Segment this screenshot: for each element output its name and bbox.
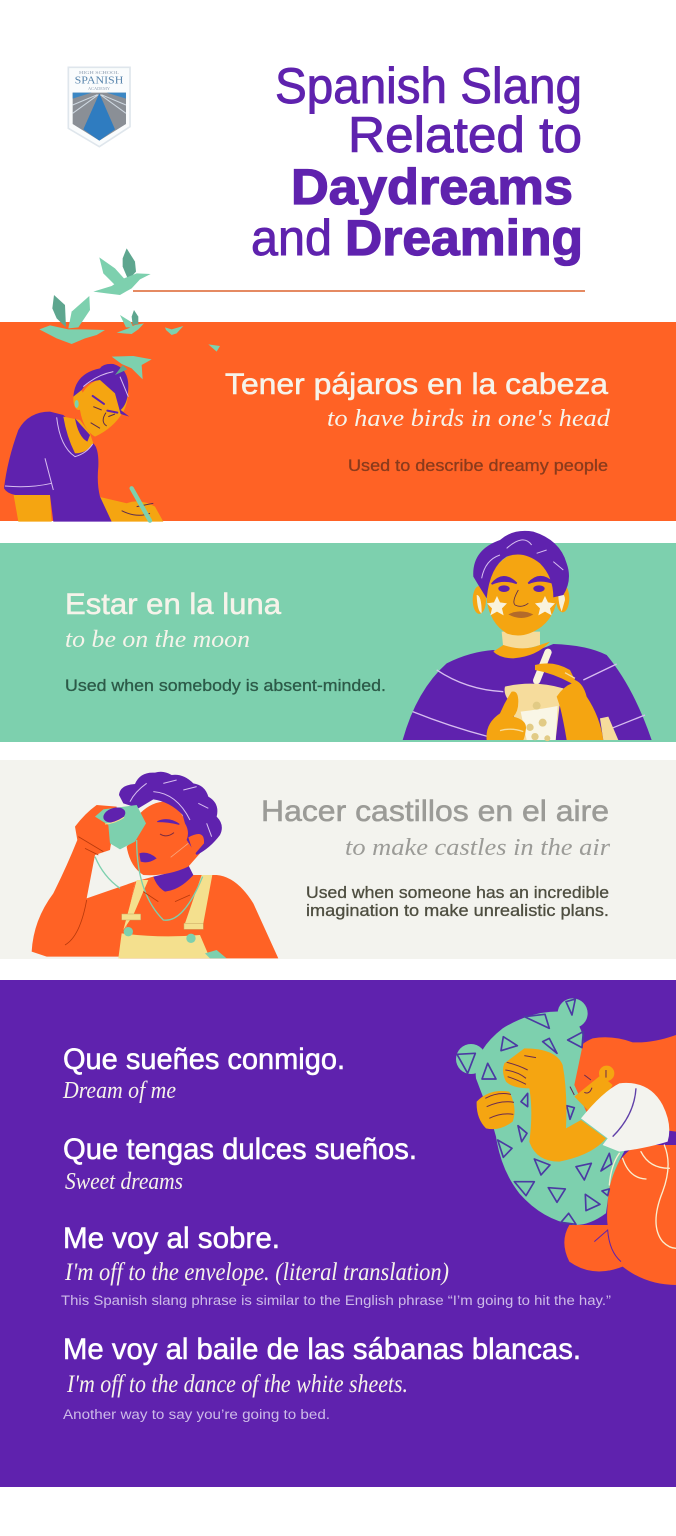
- phrase: Me voy al baile de las sábanas blancas: I'm off to the dance of the white sheets.: [66, 1371, 408, 1398]
- illustration: person with bubble tea: [403, 531, 652, 741]
- title: Daydreams: [291, 159, 573, 215]
- pattern: triangles on bear: [457, 999, 612, 1224]
- phrase: Me voy al sobre: [61, 1222, 611, 1308]
- phrase: Que sueñes conmigo: Que sueñes conmigo.: [63, 1043, 345, 1076]
- translation: to be on the moon: [65, 627, 250, 653]
- description: Used when someone has an incredible: [306, 884, 609, 902]
- description: Used when somebody is absent-minded.: [65, 677, 386, 695]
- heading: Tener pájaros en la cabeza: Tener pájaros en la cabeza: [225, 368, 608, 401]
- title: Dreaming: [345, 210, 583, 266]
- heading: Estar en la luna: Estar en la luna: [65, 588, 281, 621]
- phrase: Que sueñes conmigo: Dream of me: [62, 1078, 176, 1104]
- logo: Spanish academy shield: HIGH SCHOOL: [79, 70, 119, 75]
- logo: Spanish academy shield: [68, 67, 130, 147]
- panel: hacer castillos en el aire: [0, 760, 676, 959]
- translation: to have birds in one's head: [327, 406, 611, 432]
- title: and: [251, 210, 332, 266]
- logo: Spanish academy shield: SPANISH: [75, 75, 123, 86]
- description: imagination to make unrealistic plans.: [306, 902, 609, 920]
- phrase: Me voy al baile de las sábanas blancas: [63, 1333, 581, 1422]
- phrase: Me voy al sobre: This Spanish slang phrase is similar to the English phrase “I’m going to hit the hay.”: [61, 1293, 611, 1308]
- illustration: person with camera: [32, 772, 278, 958]
- phrase: Me voy al baile de las sábanas blancas: Another way to say you’re going to bed.: [63, 1407, 330, 1422]
- phrase: Me voy al sobre: Me voy al sobre.: [63, 1222, 280, 1255]
- icon: flock of birds: [39, 248, 220, 352]
- heading: Hacer castillos en el aire: Hacer castillos en el aire: [261, 795, 609, 828]
- panel: sleep phrases: [0, 980, 676, 1487]
- title: Spanish Slang: [275, 58, 582, 114]
- description: Used to describe dreamy people: [348, 457, 608, 475]
- description: [306, 884, 609, 920]
- phrase: Que tengas dulces sueños: Que tengas dulces sueños.: [63, 1133, 417, 1166]
- illustration: person with birds flying from head: [4, 248, 220, 522]
- panel: tener pájaros en la cabeza: [0, 248, 676, 522]
- phrase: Que sueñes conmigo: [62, 1043, 345, 1104]
- illustration: sleeper hugging teddy bear: [456, 998, 676, 1285]
- phrase: Que tengas dulces sueños: [63, 1133, 417, 1195]
- logo: Spanish academy shield: ACADEMY: [88, 86, 110, 91]
- translation: to make castles in the air: [345, 835, 611, 861]
- phrase: Me voy al baile de las sábanas blancas: Me voy al baile de las sábanas blancas.: [63, 1333, 581, 1366]
- panel: estar en la luna: [0, 531, 676, 742]
- phrase: Que tengas dulces sueños: Sweet dreams: [65, 1169, 183, 1195]
- icon: star cheeks: [487, 596, 555, 615]
- title: [251, 58, 583, 266]
- phrase: Me voy al sobre: I'm off to the envelope. (literal translation): [64, 1259, 449, 1286]
- title: Related to: [348, 107, 582, 163]
